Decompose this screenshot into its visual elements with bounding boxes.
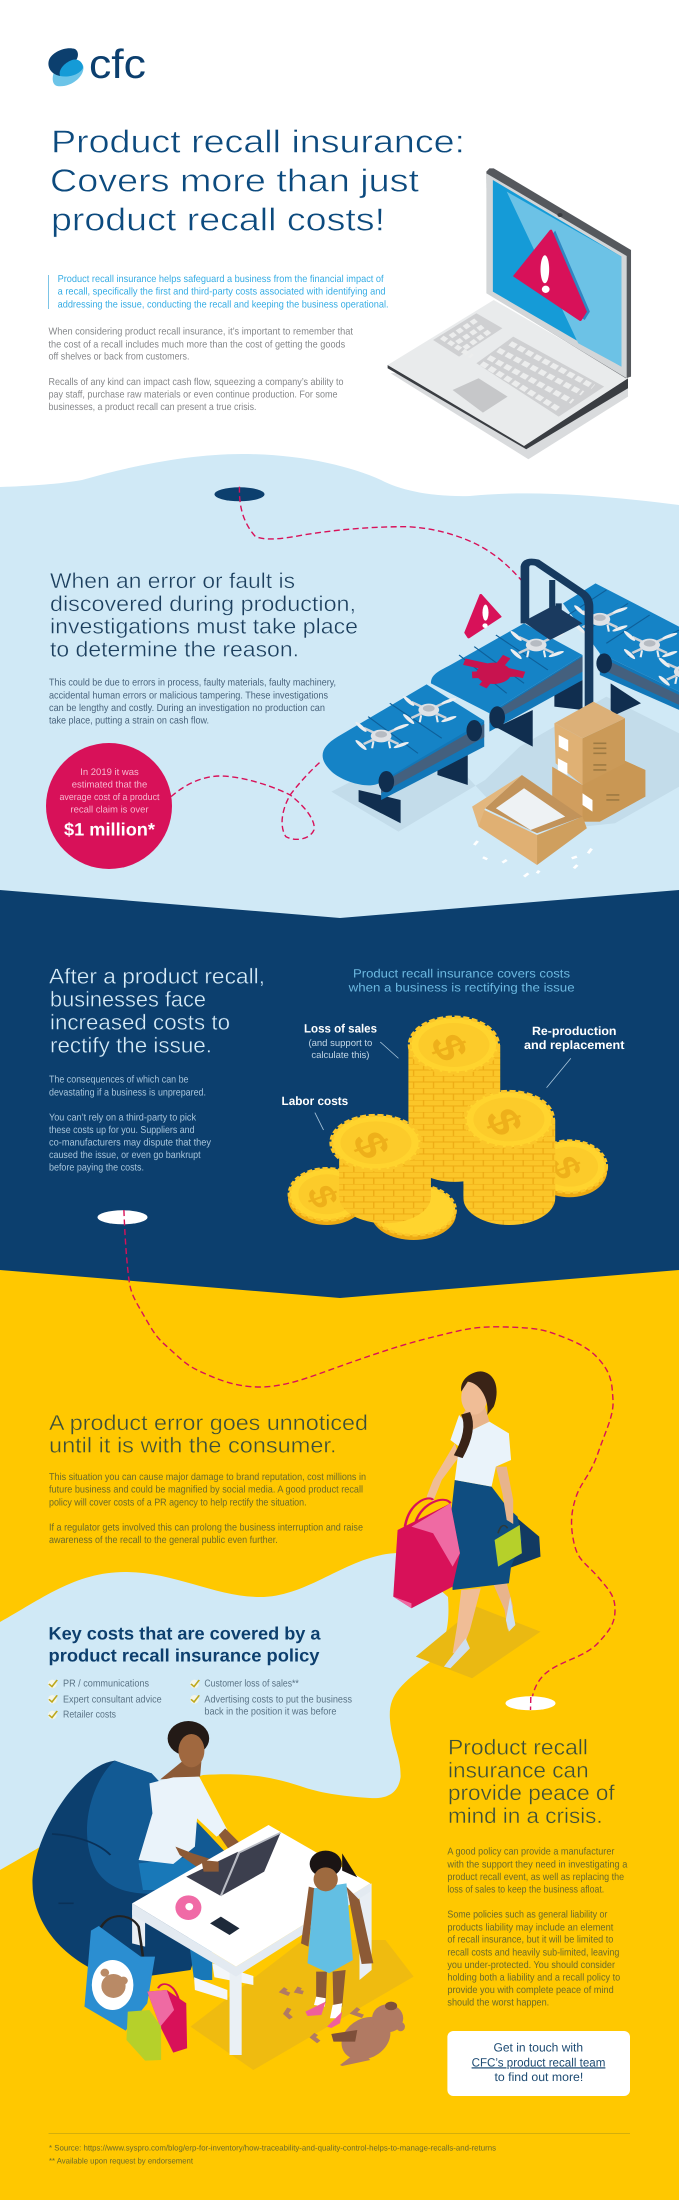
icon: laptop with warning [388,168,631,459]
title: product recall costs! [51,202,385,238]
logo wordmark: cfc [89,41,146,87]
dashed path through yellow section [124,1210,615,1708]
list: covered costs: Expert consultant advice [63,1694,162,1705]
dashed path to conveyor [239,487,524,583]
right coin stack: $ [475,1102,534,1141]
front leg and shoe [444,1588,481,1668]
list: covered costs: Customer loss of sales** [204,1679,299,1690]
heading: product error unnoticed [49,1411,368,1458]
heading: key costs: product recall insurance policy [48,1645,320,1665]
title: Covers more than just [50,163,419,199]
subheading: covers costs: Product recall insurance covers costs [353,967,570,981]
heading: production error: to determine the reason. [50,638,299,662]
subheading: covers costs: when a business is rectifying the issue [347,981,575,995]
mother blouse [139,1777,227,1864]
body: peace of mind: with the support they need in investigating a [446,1859,628,1870]
footnotes: * Source: https://www.syspro.com/blog/erp-for-inventory/how-traceability-and-quality-control-helps-to-manage-recalls-and-returns [49,2144,496,2153]
heading: product error unnoticed: A product error goes unnoticed [49,1411,368,1435]
icon: red warning sign [466,595,500,637]
heading: after a product recall: businesses face [50,988,206,1012]
conveyor segment three [563,583,679,715]
body: after a product recall [49,1075,211,1174]
body: product error unnoticed: future business and could be magnified by social media. A good product recall [49,1485,363,1496]
intro body text: businesses, a product recall can present a true crisis. [48,402,256,413]
heading: after a product recall [49,964,265,1057]
list: covered costs: Retailer costs [63,1710,116,1721]
faulty red drone [464,657,524,687]
subheading: covers costs [347,967,575,995]
body: peace of mind [446,1847,628,2009]
conveyor floor shadow [331,697,679,833]
stacked cardboard boxes [552,702,645,822]
child [301,1851,373,2028]
title: Product recall insurance: [51,124,465,160]
marker: white ellipse at path end [506,1696,556,1710]
body: peace of mind: loss of sales to keep the business afloat. [447,1885,604,1896]
open box with packing foam [472,775,592,877]
mother arms [175,1828,243,1872]
marker: white ellipse in navy section [98,1210,148,1224]
laptop on table [186,1833,281,1896]
heading: product error unnoticed: until it is with the consumer. [49,1434,336,1458]
body: product error unnoticed: awareness of the recall to the general public even further. [49,1535,278,1546]
mother jeans and shoes [139,1857,253,2000]
body: peace of mind: recall costs and heavily sub-limited, leaving [447,1947,619,1958]
heading: peace of mind: mind in a crisis. [448,1804,603,1828]
label: re-production and replacement: Re-production [532,1024,616,1038]
right coin stack [463,1091,555,1225]
beanbag [32,1761,230,1980]
logo icon [48,48,84,86]
heading: after a product recall: increased costs to [50,1010,230,1034]
body: peace of mind: you under-protected. You should consider [447,1960,616,1971]
heading: peace of mind: provide peace of [448,1781,615,1805]
intro callout: a recall, specifically the first and third-party costs associated with identifying and [58,287,386,298]
heading: production error: discovered during production, [50,592,356,616]
intro body text: When considering product recall insurance, it’s important to remember that [48,327,353,338]
call to action button: CFC’s product recall team [472,2055,605,2069]
body: peace of mind: Some policies such as general liability or [447,1910,608,1921]
dashed path end over marker [530,1697,532,1710]
body: after a product recall: these costs up for you. Suppliers and [49,1125,194,1136]
check icons [48,1680,199,1719]
green shopping bag [495,1525,522,1567]
list: covered costs: PR / communications [63,1679,149,1690]
bottom-middle flat coin [371,1185,456,1240]
body: production error: This could be due to errors in process, faulty materials, faulty machinery, [49,678,336,689]
label: loss of sales [304,1022,377,1061]
intro callout [48,274,389,310]
phone [210,1917,240,1935]
body: production error: accidental human errors or malicious tampering. These investigations [49,690,328,701]
footnotes: ** Available upon request by endorsement [49,2156,194,2165]
gantry [523,562,589,710]
label: re-production and replacement: and replacement [524,1038,624,1052]
body: peace of mind: should the worst happen. [447,1998,549,2009]
intro callout: Product recall insurance helps safeguard a business from the financial impact of [58,274,384,285]
blouse [450,1415,511,1487]
skirt flare [509,1517,541,1568]
woman's floor shadow [416,1607,541,1678]
mother hands on laptop [201,1860,219,1872]
logo [48,41,146,87]
intro body text: Recalls of any kind can impact cash flow, squeezing a company’s ability to [48,377,344,388]
body: peace of mind: provide you with complete peace of mind [447,1985,614,1996]
panel background: navy recall cost section [0,890,679,1305]
drones on belt [354,604,679,751]
left arm [427,1443,459,1502]
label: re-production and replacement [524,1024,624,1052]
body: product error unnoticed: This situation you can cause major damage to brand reputation, cost millions in [49,1472,366,1483]
mother head and hair [160,1721,209,1779]
list: covered costs [63,1679,352,1721]
label: loss of sales: calculate this) [311,1050,369,1061]
body: peace of mind: product recall event, as well as replacing the [447,1872,624,1883]
illustration: coin stacks [288,1017,607,1240]
intro callout: addressing the issue, conducting the recall and keeping the business operational. [58,299,389,310]
heading: production error [50,569,358,662]
callout: $1 million stat: In 2019 it was [80,767,139,778]
body: product error unnoticed: If a regulator gets involved this can prolong the business interruption and raise [49,1522,363,1533]
bottom-left flat coin: $ [298,1180,348,1213]
heading: after a product recall: After a product recall, [49,964,265,988]
conveyor segment two [431,623,583,747]
left coin stack: $ [342,1126,401,1164]
panel background: light blue production section [0,454,679,925]
body: production error [49,678,336,727]
table floor shadow [191,1940,414,2070]
intro body text [48,327,353,413]
heading: peace of mind: Product recall [448,1736,588,1760]
heading: production error: When an error or fault is [50,569,295,593]
heading: peace of mind: insurance can [448,1758,589,1782]
hair and braid [458,1371,497,1457]
green small bag [126,2010,161,2061]
leader lines [315,1042,571,1130]
title [50,124,465,238]
back coin stack: $ [420,1028,479,1066]
list: covered costs: Advertising costs to put the business [204,1694,352,1705]
callout: $1 million stat: recall claim is over [70,805,149,816]
heading: after a product recall: rectify the issue. [50,1033,212,1057]
body: after a product recall: You can’t rely on a third-party to pick [49,1112,197,1123]
intro body text: off shelves or back from customers. [48,352,190,363]
left coin stack [331,1115,431,1223]
start marker: navy ellipse [214,487,264,501]
label: labor costs: Labor costs [282,1094,349,1108]
right flat coin: $ [541,1151,591,1184]
panel background: yellow consumer section [0,1270,679,2200]
body: peace of mind: of recall insurance, but it will be limited to [447,1935,614,1946]
call to action button: Get in touch with [494,2040,583,2054]
label: loss of sales: Loss of sales [304,1022,377,1036]
call to action button [447,2031,630,2096]
conveyor segment one [323,684,484,823]
callout: $1 million stat [46,743,172,869]
pink small bag [147,1984,187,2053]
body: peace of mind: A good policy can provide a manufacturer [447,1847,615,1858]
back leg and shoe [494,1583,515,1632]
body: after a product recall: co-manufacturers may dispute that they [49,1137,211,1148]
blue shopping bag with bear logo [84,1916,155,2031]
intro body text: pay staff, purchase raw materials or even continue production. For some [48,389,338,400]
body: production error: take place, putting a strain on cash flow. [49,716,209,727]
heading: peace of mind [448,1736,615,1828]
illustration: conveyor line with drones and boxes [323,562,679,877]
callout: $1 million stat: average cost of a product [60,792,160,803]
panel background: light blue key costs blob [0,1553,448,1870]
body: after a product recall: before paying the costs. [49,1163,144,1174]
right flat coin [532,1141,607,1197]
body: production error: can be lengthy and costly. During an investigation no production can [49,703,325,714]
body: product error unnoticed: policy will cover costs of a PR agency to help rectify the situation. [49,1497,307,1508]
dashed path from stat to conveyor [171,762,320,839]
teddy bear and crumbs [282,1987,405,2067]
heading: production error: investigations must take place [50,615,358,639]
neck and face [459,1380,489,1430]
footnotes [49,2144,496,2165]
call to action button: to find out more! [494,2070,583,2084]
callout: $1 million stat: estimated that the [72,780,147,791]
label: loss of sales: (and support to [308,1038,372,1049]
illustration: woman with shopping bags [393,1371,541,1678]
intro body text: the cost of a recall includes much more than the cost of getting the goods [48,339,345,350]
body: peace of mind: holding both a liability and a recall policy to [447,1972,621,1983]
right arm [496,1467,513,1524]
callout: $1 million stat: $1 million* [64,820,155,840]
body: after a product recall: The consequences of which can be [49,1075,189,1086]
footer rule [48,2133,630,2134]
body: after a product recall: caused the issue, or even go bankrupt [49,1150,201,1161]
body: after a product recall: devastating if a business is unprepared. [49,1087,206,1098]
list: covered costs: back in the position it was before [204,1707,337,1718]
body: product error unnoticed [49,1472,366,1546]
skirt [450,1480,522,1590]
body: peace of mind: products liability may include an element [447,1922,613,1933]
pink shopping bag [393,1498,460,1608]
table [132,1825,372,2055]
bottom-left flat coin [288,1168,366,1225]
donut [175,1895,201,1920]
illustration: mother at table with child [32,1721,414,2070]
back coin stack [408,1017,500,1182]
heading: key costs: Key costs that are covered by a [48,1623,321,1643]
heading: key costs [48,1623,321,1665]
